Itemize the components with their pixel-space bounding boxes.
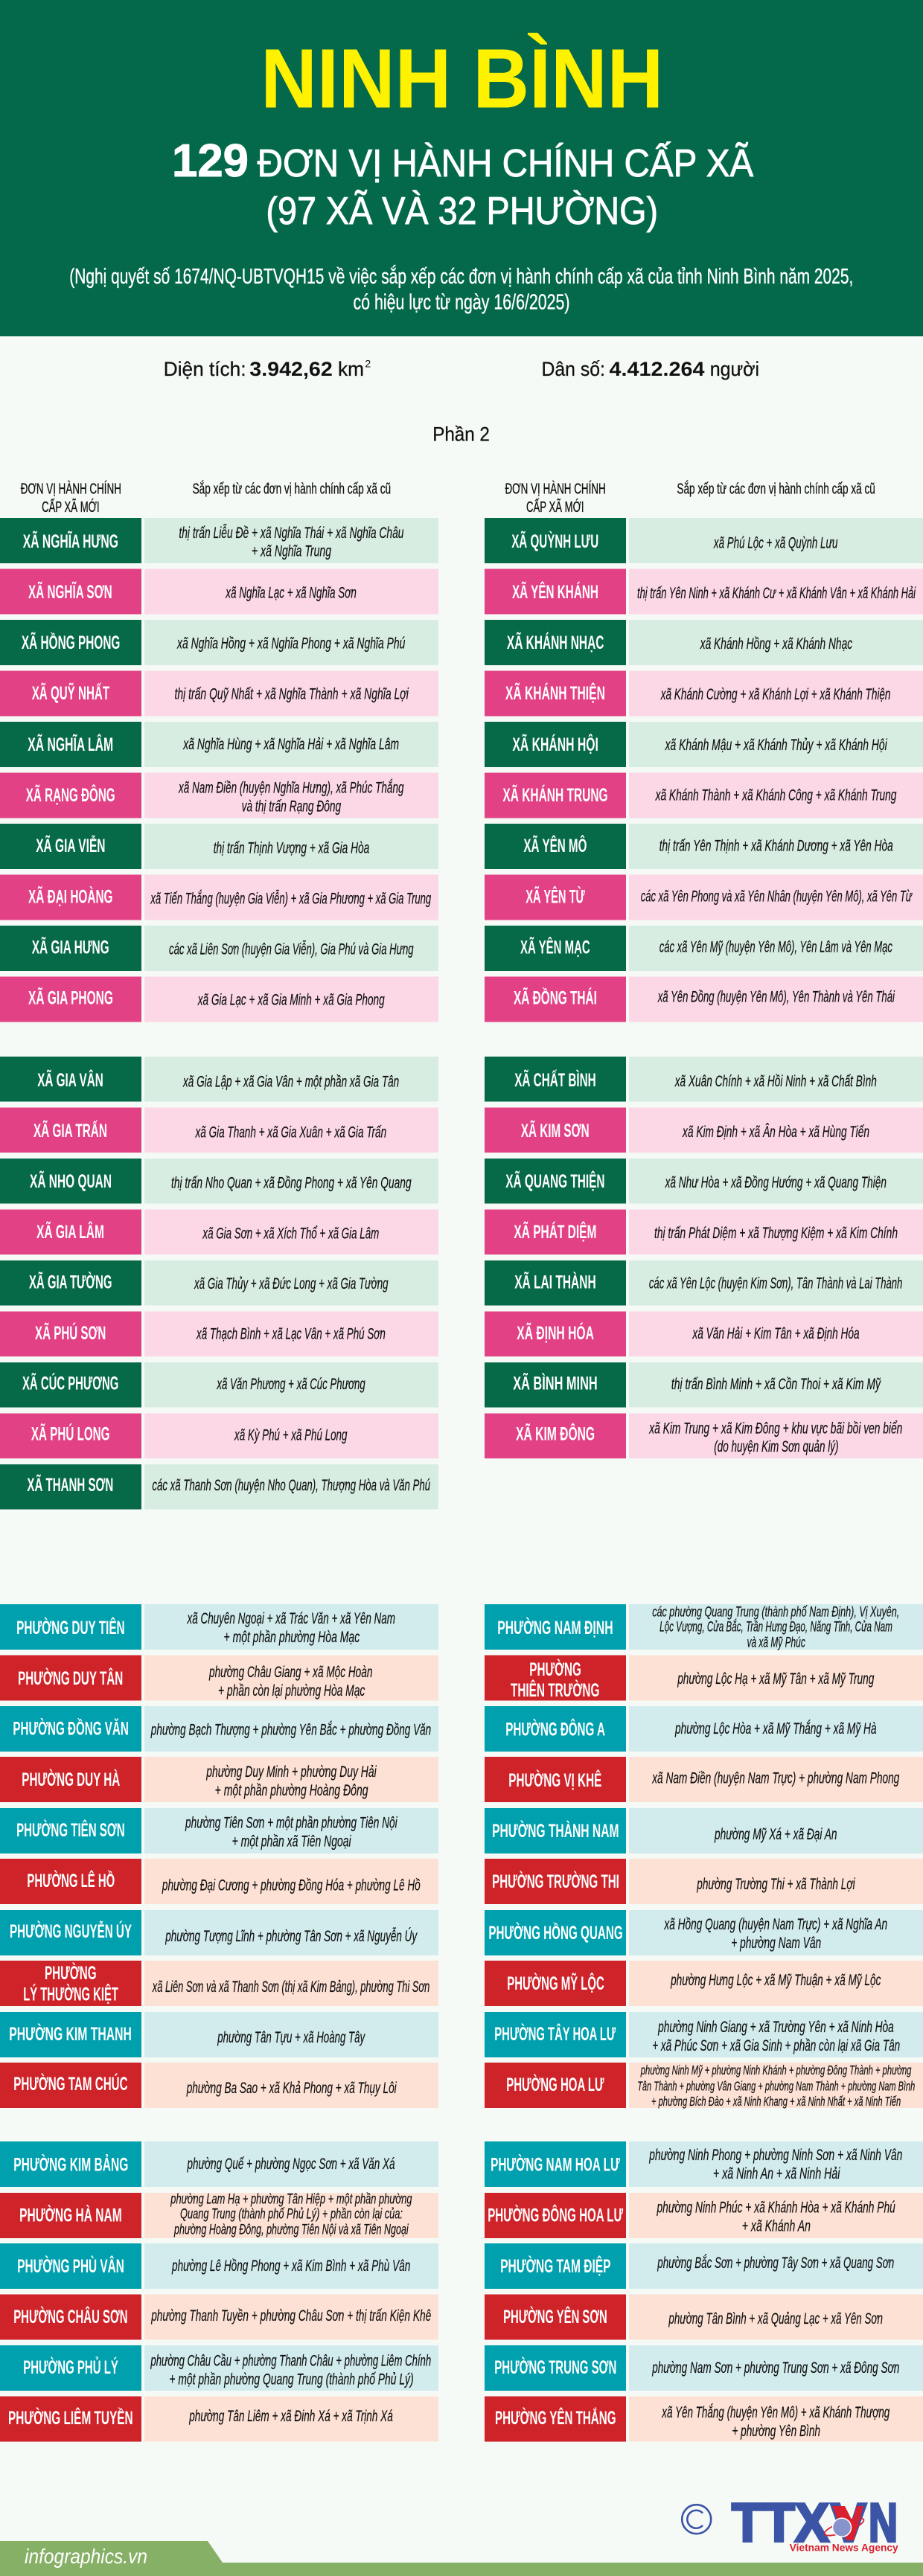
row: Xã Yên Mạc: XÃ YÊN MẠC bbox=[520, 936, 590, 958]
row: Xã Phú Sơn: xã Thạch Bình + xã Lạc Vân + xã Phú Sơn bbox=[196, 1324, 386, 1342]
panel: wards group 4 right bbox=[485, 2141, 923, 2442]
footer site name: infographics.vn bbox=[25, 2545, 147, 2568]
table header left: Sắp xếp từ các đơn vị hành chính cấp xã cũ bbox=[193, 481, 391, 498]
row: Xã Nho Quan: XÃ NHO QUAN bbox=[30, 1170, 112, 1192]
row: Phường Đông Hoa Lư bbox=[485, 2193, 923, 2238]
row: Xã Gia Phong: XÃ GIA PHONG bbox=[28, 986, 113, 1008]
row: Phường Đồng Văn bbox=[0, 1706, 438, 1752]
row: Xã Đại Hoàng bbox=[0, 875, 438, 920]
row: Xã Định Hóa bbox=[485, 1311, 923, 1356]
logo: TTXVN Vietnam News Agency: N bbox=[869, 2493, 898, 2554]
stat: population: người bbox=[710, 358, 759, 380]
row: Phường Tam Điệp: PHƯỜNG TAM ĐIỆP bbox=[500, 2255, 610, 2277]
row: Xã Nghĩa Hưng: XÃ NGHĨA HƯNG bbox=[23, 530, 118, 552]
row: Phường Nguyễn Úy bbox=[0, 1910, 438, 1955]
row: Phường Tiên Sơn: phường Tiên Sơn + một phần phường Tiên Nội bbox=[185, 1814, 397, 1832]
row: Phường Phủ Lý: PHƯỜNG PHỦ LÝ bbox=[23, 2356, 118, 2378]
row: Phường Mỹ Lộc bbox=[485, 1961, 923, 2006]
row: Xã Chất Bình bbox=[485, 1057, 923, 1101]
panel: wards group 3 left bbox=[0, 1604, 438, 2108]
row: Xã Bình Minh bbox=[485, 1362, 923, 1408]
logo: TTXVN Vietnam News Agency: V bbox=[831, 2493, 866, 2554]
row: Phường Duy Hà bbox=[0, 1757, 438, 1802]
row: Phường Phù Vân: PHƯỜNG PHÙ VÂN bbox=[17, 2255, 124, 2277]
row: Xã Kim Đông bbox=[485, 1414, 923, 1458]
row: Phường Yên Sơn bbox=[485, 2295, 923, 2339]
row: Xã Nghĩa Sơn: xã Nghĩa Lạc + xã Nghĩa Sơn bbox=[226, 583, 357, 601]
row: Xã Khánh Thiện: XÃ KHÁNH THIỆN bbox=[505, 682, 605, 704]
row: Phường Kim Thanh bbox=[0, 2012, 438, 2057]
row: Phường Duy Tân: PHƯỜNG DUY TÂN bbox=[18, 1667, 123, 1689]
row: Xã Quang Thiện: XÃ QUANG THIỆN bbox=[505, 1170, 604, 1192]
row: Phường Nguyễn Úy: PHƯỜNG NGUYỄN ÚY bbox=[10, 1920, 132, 1942]
row: Xã Cúc Phương: xã Văn Phương + xã Cúc Phương bbox=[217, 1375, 365, 1393]
row: Phường Nam Định: PHƯỜNG NAM ĐỊNH bbox=[497, 1616, 613, 1638]
logo: TTXVN Vietnam News Agency bbox=[732, 2493, 898, 2554]
row: Xã Gia Trấn: XÃ GIA TRẤN bbox=[33, 1119, 107, 1141]
row: Xã Đại Hoàng: XÃ ĐẠI HOÀNG bbox=[28, 885, 113, 908]
row: Xã Khánh Thiện bbox=[485, 671, 923, 716]
row: Phường Hoa Lư: PHƯỜNG HOA LƯ bbox=[506, 2073, 604, 2095]
table header left: ĐƠN VỊ HÀNH CHÍNH bbox=[21, 481, 121, 498]
row: Xã Định Hóa: XÃ ĐỊNH HÓA bbox=[517, 1321, 594, 1344]
row: Phường Tam Chúc: phường Ba Sao + xã Khả Phong + xã Thụy Lôi bbox=[186, 2079, 397, 2097]
row: Xã Chất Bình: XÃ CHẤT BÌNH bbox=[514, 1068, 596, 1091]
row: Phường Lê Hồ: phường Đại Cương + phường Đồng Hóa + phường Lê Hồ bbox=[162, 1877, 421, 1894]
row: Phường Kim Bảng: phường Quế + phường Ngọc Sơn + xã Văn Xá bbox=[187, 2155, 395, 2173]
row: Xã Quỹ Nhất: XÃ QUỸ NHẤT bbox=[32, 682, 109, 704]
resolution note: có hiệu lực từ ngày 16/6/2025) bbox=[353, 291, 570, 315]
row: Phường Yên Thắng: PHƯỜNG YÊN THẮNG bbox=[495, 2406, 616, 2429]
row: Xã Nho Quan bbox=[0, 1159, 438, 1204]
row: Phường Lý Thường Kiệt: xã Liên Sơn và xã Thanh Sơn (thị xã Kim Bảng), phường Thi Sơn bbox=[152, 1978, 429, 1996]
row: Phường Hoa Lư bbox=[485, 2063, 923, 2109]
footer band bbox=[0, 2541, 923, 2576]
row: Phường Liêm Tuyền bbox=[0, 2396, 438, 2442]
row: Phường Nam Hoa Lư: PHƯỜNG NAM HOA LƯ bbox=[491, 2153, 620, 2176]
row: Phường Yên Sơn: PHƯỜNG YÊN SƠN bbox=[503, 2305, 607, 2327]
row: Xã Quỳnh Lưu: XÃ QUỲNH LƯU bbox=[511, 530, 598, 552]
row: Phường Nam Hoa Lư bbox=[485, 2141, 923, 2187]
row: Xã Nghĩa Sơn: XÃ NGHĨA SƠN bbox=[28, 580, 112, 603]
icon: copyright mark bbox=[682, 2505, 711, 2534]
stat: population: Dân số: bbox=[542, 358, 605, 380]
row: Phường Đông Hoa Lư: PHƯỜNG ĐÔNG HOA LƯ bbox=[488, 2204, 623, 2226]
stat: area: km bbox=[338, 358, 364, 380]
row: Phường Châu Sơn bbox=[0, 2295, 438, 2339]
row: Phường Yên Thắng bbox=[485, 2396, 923, 2442]
row: Xã Nghĩa Hưng: + xã Nghĩa Trung bbox=[252, 542, 331, 560]
row: Xã Khánh Nhạc: XÃ KHÁNH NHẠC bbox=[507, 631, 604, 653]
stat: area bbox=[164, 358, 371, 380]
row: Xã Gia Phong: xã Gia Lạc + xã Gia Minh + xã Gia Phong bbox=[197, 990, 385, 1008]
row: Xã Khánh Trung bbox=[485, 772, 923, 818]
row: Xã Quỳnh Lưu bbox=[485, 518, 923, 563]
row: Phường Phủ Lý bbox=[0, 2345, 438, 2391]
row: Xã Gia Tường: XÃ GIA TƯỜNG bbox=[29, 1271, 112, 1293]
row: Xã Gia Viễn: thị trấn Thịnh Vượng + xã Gia Hòa bbox=[214, 839, 369, 856]
panel: communes group 2 left bbox=[0, 1057, 438, 1509]
subtitle line 1: ĐƠN VỊ HÀNH CHÍNH CẤP XÃ bbox=[258, 141, 753, 185]
row: Phường Đồng Văn: phường Bạch Thượng + phường Yên Bắc + phường Đồng Văn bbox=[150, 1720, 431, 1739]
row: Xã Khánh Trung: XÃ KHÁNH TRUNG bbox=[502, 784, 608, 806]
row: Xã Bình Minh: XÃ BÌNH MINH bbox=[513, 1372, 598, 1394]
row: Xã Yên Mô: XÃ YÊN MÔ bbox=[523, 834, 587, 856]
row: Phường Phủ Lý: + một phần phường Quang Trung (thành phố Phủ Lý) bbox=[169, 2370, 414, 2388]
row: Xã Gia Viễn bbox=[0, 824, 438, 869]
row: Phường Duy Hà: + một phần phường Hoàng Đông bbox=[215, 1781, 368, 1799]
row: Xã Rạng Đông: xã Nam Điền (huyện Nghĩa Hưng), xã Phúc Thắng bbox=[178, 778, 404, 797]
row: Phường Yên Thắng: + phường Yên Bình bbox=[732, 2422, 820, 2440]
row: Xã Gia Vân: xã Gia Lập + xã Gia Vân + một phần xã Gia Tân bbox=[182, 1072, 399, 1090]
row: Phường Kim Thanh: PHƯỜNG KIM THANH bbox=[9, 2022, 132, 2045]
row: Phường Vị Khê bbox=[485, 1757, 923, 1802]
row: Phường Tam Chúc bbox=[0, 2063, 438, 2108]
row: Xã Nghĩa Lâm bbox=[0, 722, 438, 767]
logo: TTXVN Vietnam News Agency: TTX bbox=[732, 2493, 829, 2554]
row: Phường Liêm Tuyền: phường Tân Liêm + xã Đinh Xá + xã Trịnh Xá bbox=[189, 2407, 393, 2425]
row: Phường Nam Hoa Lư: + xã Ninh An + xã Ninh Hải bbox=[713, 2165, 840, 2182]
row: Xã Phú Sơn bbox=[0, 1311, 438, 1356]
row: Phường Đồng Văn: PHƯỜNG ĐỒNG VĂN bbox=[13, 1717, 129, 1740]
row: Phường Thành Nam bbox=[485, 1808, 923, 1853]
row: Xã Kim Đông: XÃ KIM ĐÔNG bbox=[516, 1423, 595, 1445]
row: Phường Hồng Quang: PHƯỜNG HỒNG QUANG bbox=[488, 1921, 623, 1944]
stat: area: 2 bbox=[365, 358, 371, 370]
row: Phường Phù Vân: phường Lê Hồng Phong + xã Kim Bình + xã Phù Vân bbox=[171, 2257, 410, 2275]
row: Xã Kim Sơn: XÃ KIM SƠN bbox=[521, 1119, 590, 1141]
row: Xã Đại Hoàng: xã Tiến Thắng (huyện Gia Viễn) + xã Gia Phương + xã Gia Trung bbox=[150, 888, 431, 907]
row: Phường Duy Tiên bbox=[0, 1604, 438, 1650]
row: Phường Duy Tân: + phần còn lại phường Hòa Mạc bbox=[218, 1682, 365, 1699]
row: Phường Thành Nam: PHƯỜNG THÀNH NAM bbox=[492, 1819, 619, 1842]
row: Xã Gia Lâm: XÃ GIA LÂM bbox=[36, 1220, 104, 1243]
row: Phường Lê Hồ bbox=[0, 1859, 438, 1904]
row: Xã Nghĩa Sơn bbox=[0, 568, 438, 615]
stat: population: 4.412.264 bbox=[609, 358, 704, 380]
row: Xã Gia Trấn bbox=[0, 1107, 438, 1153]
row: Phường Nam Định: và xã Mỹ Phúc bbox=[747, 1635, 805, 1650]
row: Xã Nghĩa Lâm: xã Nghĩa Hùng + xã Nghĩa Hải + xã Nghĩa Lâm bbox=[183, 735, 399, 753]
row: Phường Thành Nam: phường Mỹ Xá + xã Đại An bbox=[714, 1825, 837, 1843]
row: Xã Nho Quan: thị trấn Nho Quan + xã Đồng Phong + xã Yên Quang bbox=[171, 1174, 412, 1192]
row: Xã Thanh Sơn bbox=[0, 1464, 438, 1509]
row: Xã Gia Hưng bbox=[0, 926, 438, 971]
row: Xã Gia Phong bbox=[0, 976, 438, 1022]
table header left: CẤP XÃ MỚI bbox=[42, 499, 100, 516]
row: Xã Gia Vân bbox=[0, 1057, 438, 1101]
row: Phường Thiên Trường: PHƯỜNG bbox=[529, 1658, 581, 1680]
row: Phường Hà Nam: PHƯỜNG HÀ NAM bbox=[19, 2204, 122, 2226]
row: Phường Lý Thường Kiệt bbox=[0, 1961, 438, 2006]
row: Xã Đồng Thái: XÃ ĐỒNG THÁI bbox=[514, 986, 597, 1008]
row: Xã Kim Sơn bbox=[485, 1107, 923, 1153]
row: Xã Phú Long bbox=[0, 1414, 438, 1458]
subtitle line 2: (97 XÃ VÀ 32 PHƯỜNG) bbox=[266, 190, 658, 233]
row: Phường Tiên Sơn: + một phần xã Tiên Ngoại bbox=[232, 1832, 351, 1850]
row: Phường Phù Vân bbox=[0, 2243, 438, 2289]
row: Xã Yên Mạc bbox=[485, 926, 923, 971]
row: Xã Yên Khánh bbox=[485, 568, 923, 615]
row: Phường Duy Tiên: xã Chuyên Ngoại + xã Trác Văn + xã Yên Nam bbox=[187, 1609, 395, 1627]
row: Xã Yên Khánh: XÃ YÊN KHÁNH bbox=[512, 580, 598, 603]
row: Phường Duy Tân: phường Châu Giang + xã Mộc Hoàn bbox=[208, 1663, 372, 1681]
row: Xã Phát Diệm: XÃ PHÁT DIỆM bbox=[514, 1220, 596, 1243]
row: Xã Quỹ Nhất: thị trấn Quỹ Nhất + xã Nghĩa Thành + xã Nghĩa Lợi bbox=[174, 685, 409, 702]
row: Phường Lý Thường Kiệt: LÝ THƯỜNG KIỆT bbox=[23, 1983, 118, 2005]
row: Xã Thanh Sơn: XÃ THANH SƠN bbox=[27, 1473, 113, 1496]
table header right: ĐƠN VỊ HÀNH CHÍNH bbox=[505, 481, 606, 498]
row: Phường Kim Thanh: phường Tân Tựu + xã Hoàng Tây bbox=[217, 2028, 365, 2046]
row: Xã Gia Hưng: XÃ GIA HƯNG bbox=[32, 936, 109, 958]
stat: area: 3.942,62 bbox=[249, 358, 333, 380]
row: Xã Gia Trấn: xã Gia Thanh + xã Gia Xuân + xã Gia Trấn bbox=[195, 1124, 386, 1141]
row: Xã Hồng Phong bbox=[0, 620, 438, 665]
row: Phường Hà Nam: Quang Trung (thành phố Phủ Lý) + phần còn lại của: bbox=[180, 2207, 403, 2223]
row: Xã Yên Mô bbox=[485, 824, 923, 869]
row: Phường Hồng Quang: + phường Nam Vân bbox=[731, 1934, 821, 1952]
row: Xã Gia Lâm bbox=[0, 1210, 438, 1255]
row: Xã Khánh Hội bbox=[485, 722, 923, 767]
row: Phường Nam Định bbox=[485, 1604, 923, 1650]
row: Phường Nguyễn Úy: phường Tượng Lĩnh + phường Tân Sơn + xã Nguyễn Úy bbox=[165, 1926, 418, 1945]
row: Phường Tây Hoa Lư: PHƯỜNG TÂY HOA LƯ bbox=[494, 2022, 616, 2045]
row: Phường Duy Tân bbox=[0, 1655, 438, 1701]
row: Xã Lai Thành: XÃ LAI THÀNH bbox=[514, 1271, 596, 1293]
row: Phường Duy Tiên: PHƯỜNG DUY TIÊN bbox=[16, 1616, 125, 1638]
stat: area: Diện tích: bbox=[164, 358, 246, 380]
row: Phường Kim Bảng: PHƯỜNG KIM BẢNG bbox=[13, 2153, 128, 2176]
row: Phường Tiên Sơn bbox=[0, 1808, 438, 1853]
row: Xã Gia Vân: XÃ GIA VÂN bbox=[37, 1068, 103, 1091]
row: Phường Duy Hà: phường Duy Minh + phường Duy Hải bbox=[206, 1763, 377, 1781]
row: Xã Lai Thành bbox=[485, 1260, 923, 1305]
row: Phường Hồng Quang bbox=[485, 1910, 923, 1955]
panel: wards group 3 right bbox=[485, 1604, 923, 2109]
row: Xã Cúc Phương bbox=[0, 1362, 438, 1408]
row: Xã Thanh Sơn: các xã Thanh Sơn (huyện Nho Quan), Thượng Hòa và Văn Phú bbox=[152, 1476, 430, 1494]
row: Phường Liêm Tuyền: PHƯỜNG LIÊM TUYỀN bbox=[8, 2406, 133, 2429]
row: Phường Đông Hoa Lư: + xã Khánh An bbox=[742, 2217, 811, 2235]
row: Phường Phủ Lý: phường Châu Cầu + phường Thanh Châu + phường Liêm Chính bbox=[150, 2351, 431, 2369]
row: Phường Châu Sơn: phường Thanh Tuyền + phường Châu Sơn + thị trấn Kiện Khê bbox=[151, 2307, 431, 2325]
row: Phường Hà Nam bbox=[0, 2192, 438, 2238]
row: Phường Kim Bảng bbox=[0, 2141, 438, 2187]
panel: wards group 4 left bbox=[0, 2141, 438, 2442]
row: Phường Duy Tiên: + một phần phường Hòa Mạc bbox=[223, 1628, 360, 1646]
table header right bbox=[505, 481, 875, 516]
panel: communes group 1 right bbox=[485, 518, 923, 1022]
resolution note bbox=[69, 265, 853, 315]
title: NINH BÌNH bbox=[261, 32, 663, 126]
row: Xã Phát Diệm bbox=[485, 1210, 923, 1255]
row: Phường Duy Hà: PHƯỜNG DUY HÀ bbox=[22, 1768, 120, 1790]
row: Xã Cúc Phương: XÃ CÚC PHƯƠNG bbox=[22, 1372, 118, 1394]
stat: population bbox=[542, 358, 759, 380]
row: Phường Tam Chúc: PHƯỜNG TAM CHÚC bbox=[13, 2072, 128, 2095]
row: Phường Tây Hoa Lư bbox=[485, 2012, 923, 2057]
row: Xã Nghĩa Hưng: thị trấn Liễu Đề + xã Nghĩa Thái + xã Nghĩa Châu bbox=[179, 522, 404, 542]
row: Xã Quỹ Nhất bbox=[0, 671, 438, 716]
logo: TTXVN Vietnam News Agency: Vietnam News Agency bbox=[790, 2542, 898, 2553]
row: Phường Vị Khê: PHƯỜNG VỊ KHÊ bbox=[508, 1769, 601, 1791]
row: Phường Trung Sơn bbox=[485, 2345, 923, 2391]
row: Xã Rạng Đông: XÃ RẠNG ĐÔNG bbox=[26, 784, 115, 806]
row: Phường Trường Thi bbox=[485, 1859, 923, 1904]
row: Xã Nghĩa Lâm: XÃ NGHĨA LÂM bbox=[28, 733, 113, 755]
row: Xã Phú Long: xã Kỳ Phú + xã Phú Long bbox=[234, 1426, 347, 1444]
row: Xã Gia Hưng: các xã Liên Sơn (huyện Gia Viễn), Gia Phú và Gia Hưng bbox=[169, 938, 414, 958]
row: Xã Đồng Thái bbox=[485, 976, 923, 1022]
row: Phường Lý Thường Kiệt: PHƯỜNG bbox=[45, 1961, 97, 1984]
row: Phường Lê Hồ: PHƯỜNG LÊ HỒ bbox=[27, 1869, 115, 1891]
row: Xã Rạng Đông: và thị trấn Rạng Đông bbox=[242, 797, 341, 815]
panel: header bbox=[0, 0, 923, 336]
row: Xã Hồng Phong: xã Nghĩa Hồng + xã Nghĩa Phong + xã Nghĩa Phú bbox=[176, 634, 405, 652]
row: Xã Gia Tường bbox=[0, 1260, 438, 1305]
row: Xã Rạng Đông bbox=[0, 772, 438, 818]
row: Phường Mỹ Lộc: PHƯỜNG MỸ LỘC bbox=[507, 1972, 604, 1994]
row: Xã Kim Đông: (do huyện Kim Sơn quản lý) bbox=[714, 1438, 838, 1455]
table header left bbox=[21, 481, 391, 516]
row: Xã Khánh Nhạc bbox=[485, 620, 923, 665]
row: Phường Hà Nam: phường Hoàng Đông, phường Tiên Nội và xã Tiên Ngoại bbox=[173, 2222, 409, 2237]
panel: communes group 2 right bbox=[485, 1057, 923, 1458]
row: Phường Thiên Trường bbox=[485, 1655, 923, 1701]
panel: communes group 1 left bbox=[0, 518, 438, 1022]
table header right: CẤP XÃ MỚI bbox=[526, 499, 584, 516]
row: Phường Hà Nam: phường Lam Hạ + phường Tân Hiệp + một phần phường bbox=[170, 2192, 412, 2208]
row: Xã Khánh Hội: XÃ KHÁNH HỘI bbox=[512, 733, 598, 755]
row: Phường Đông A bbox=[485, 1706, 923, 1752]
row: Xã Hồng Phong: XÃ HỒNG PHONG bbox=[22, 631, 120, 653]
row: Xã Gia Tường: xã Gia Thủy + xã Đức Long + xã Gia Tường bbox=[194, 1275, 389, 1292]
row: Phường Tam Điệp bbox=[485, 2243, 923, 2289]
row: Xã Nghĩa Hưng bbox=[0, 518, 438, 563]
subtitle line 1 bbox=[172, 135, 753, 187]
row: Xã Quang Thiện bbox=[485, 1159, 923, 1204]
row: Xã Yên Từ: XÃ YÊN TỪ bbox=[526, 885, 585, 908]
row: Phường Châu Sơn: PHƯỜNG CHÂU SƠN bbox=[13, 2305, 128, 2327]
heading: part 2: Phần 2 bbox=[432, 423, 490, 445]
row: Xã Gia Lâm: xã Gia Sơn + xã Xích Thổ + xã Gia Lâm bbox=[202, 1224, 379, 1242]
subtitle line 1: 129 bbox=[172, 135, 249, 187]
row: Xã Phú Long: XÃ PHÚ LONG bbox=[31, 1423, 110, 1445]
row: Phường Trường Thi: PHƯỜNG TRƯỜNG THI bbox=[492, 1870, 619, 1892]
row: Xã Phú Sơn: XÃ PHÚ SƠN bbox=[35, 1321, 106, 1344]
row: Xã Quỳnh Lưu: xã Phú Lộc + xã Quỳnh Lưu bbox=[713, 534, 837, 551]
row: Xã Gia Viễn: XÃ GIA VIỄN bbox=[36, 834, 106, 856]
row: Phường Đông A: PHƯỜNG ĐÔNG A bbox=[505, 1717, 605, 1740]
row: Xã Yên Từ bbox=[485, 875, 923, 920]
row: Phường Tiên Sơn: PHƯỜNG TIÊN SƠN bbox=[16, 1819, 125, 1841]
row: Phường Thiên Trường: THIÊN TRƯỜNG bbox=[511, 1679, 599, 1701]
row: Phường Trung Sơn: PHƯỜNG TRUNG SƠN bbox=[494, 2356, 616, 2378]
